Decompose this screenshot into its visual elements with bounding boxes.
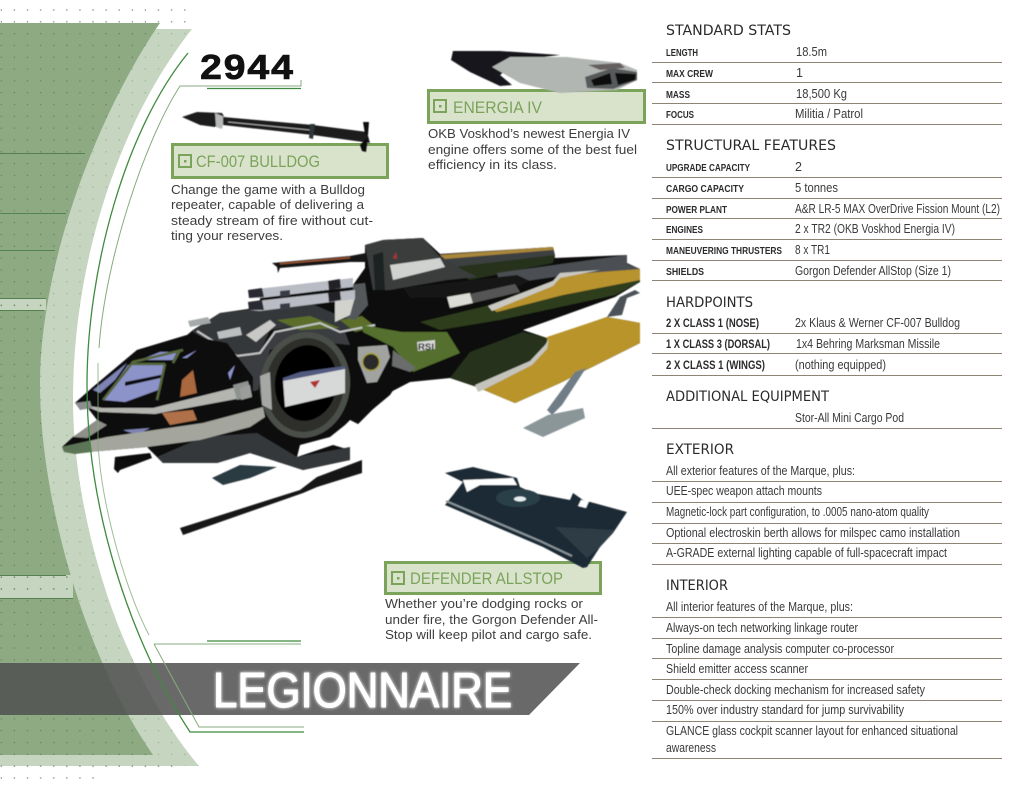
background: green curved panels with dot grid — [0, 5, 200, 782]
panel: exterior — [652, 442, 1002, 564]
row: dorsal hardpoint: 1 X CLASS 3 (DORSAL) — [666, 339, 770, 351]
callout: Energia IV — [428, 51, 644, 172]
heading: hardpoints: HARDPOINTS — [666, 295, 753, 311]
description: Energia IV — [428, 126, 637, 172]
row: length — [652, 45, 1002, 62]
row: upgrade capacity: UPGRADE CAPACITY — [666, 162, 750, 174]
upper rear wings — [420, 247, 640, 330]
description: Defender AllStop: under fire, the Gorgon Defender All- — [385, 612, 598, 627]
row: engines — [652, 222, 1002, 240]
panel: hardpoints — [652, 295, 1002, 376]
row: focus: Militia / Patrol — [795, 107, 863, 121]
panel: additional equipment — [652, 389, 1002, 428]
cockpit tower — [365, 238, 477, 290]
green side pod with RSI mark: RSI — [418, 342, 434, 352]
row: cockpit layout: GLANCE glass cockpit scanner layout for enhanced situational — [666, 724, 958, 738]
shield generator image — [445, 467, 627, 568]
cockpit canopy — [75, 335, 253, 435]
label box: Defender AllStop — [386, 562, 600, 594]
thruster cylinder — [356, 345, 400, 424]
row: max crew: MAX CREW — [666, 68, 713, 80]
description: Bulldog: steady stream of fire without cut- — [171, 213, 373, 228]
ship silhouette base — [62, 238, 640, 470]
row: shields — [652, 264, 1002, 280]
row: dorsal hardpoint: 1x4 Behring Marksman Missile — [796, 337, 940, 351]
row: cargo pod: Stor-All Mini Cargo Pod — [795, 411, 904, 425]
description: Energia IV: efficiency in its class. — [428, 157, 557, 172]
row: wing hardpoints: 2 X CLASS 1 (WINGS) — [666, 360, 765, 372]
row: maneuvering thrusters — [652, 243, 1002, 260]
row: upgrade capacity: 2 — [795, 160, 802, 174]
label box: Energia IV: ENERGIA IV — [453, 98, 543, 117]
row: max crew — [652, 66, 1002, 82]
mid weapon rack — [403, 275, 530, 308]
missile racks — [248, 278, 368, 322]
heading: additional equipment: ADDITIONAL EQUIPMENT — [666, 389, 829, 405]
row: engines: ENGINES — [666, 224, 703, 236]
row: interior intro: All interior features of the Marque, plus: — [666, 600, 853, 614]
decorative arcs and title frame lines — [87, 53, 304, 732]
description: Bulldog: repeater, capable of delivering a — [171, 197, 365, 212]
engine ring with grille panel — [240, 326, 357, 444]
row: upgrade capacity — [652, 160, 1002, 178]
description: Energia IV: OKB Voskhod’s newest Energia IV — [428, 126, 630, 141]
heading: exterior: EXTERIOR — [666, 442, 734, 458]
row: max crew: 1 — [796, 66, 803, 80]
label box: CF-007 Bulldog: CF-007 BULLDOG — [196, 152, 320, 171]
row: cargo capacity — [652, 181, 1002, 198]
title banner — [0, 663, 580, 718]
panel: interior — [652, 578, 1002, 758]
heading: structural features: STRUCTURAL FEATURES — [666, 138, 836, 154]
green side pod with RSI mark — [362, 325, 460, 372]
row: docking: Double-check docking mechanism for increased safety — [666, 683, 926, 697]
heading: standard stats: STANDARD STATS — [666, 23, 791, 39]
row: length: LENGTH — [666, 47, 698, 59]
row: dorsal hardpoint — [652, 337, 1002, 354]
row: jump survivability: 150% over industry standard for jump survivability — [666, 703, 905, 717]
row: maneuvering thrusters: 8 x TR1 — [795, 243, 830, 257]
row: engines: 2 x TR2 (OKB Voskhod Energia IV) — [795, 222, 955, 236]
weapon image: Bulldog repeater — [182, 112, 370, 152]
lower mandible — [62, 407, 265, 454]
heading: interior: INTERIOR — [666, 578, 728, 594]
row: power plant: POWER PLANT — [666, 204, 727, 216]
label box: Defender AllStop: DEFENDER ALLSTOP — [410, 569, 563, 588]
row: lighting: A-GRADE external lighting capable of full-spacecraft impact — [666, 546, 947, 560]
row: shields: SHIELDS — [666, 266, 704, 278]
panel: standard stats — [652, 23, 1002, 124]
description: Bulldog: Change the game with a Bulldog — [171, 182, 365, 197]
row: networking: Always-on tech networking linkage router — [666, 621, 858, 635]
engine image — [451, 51, 637, 93]
row: maneuvering thrusters: MANEUVERING THRUSTERS — [666, 245, 782, 257]
row: cockpit layout: awareness — [666, 741, 716, 755]
description: Defender AllStop: Stop will keep pilot and cargo safe. — [385, 627, 592, 642]
row: wing hardpoints — [652, 358, 1002, 376]
row: exterior intro: All exterior features of the Marque, plus: — [666, 464, 855, 478]
row: mass: MASS — [666, 89, 690, 101]
row: wing hardpoints: (nothing equipped) — [795, 358, 886, 372]
description: Energia IV: engine offers some of the best fuel — [428, 142, 637, 157]
row: nose hardpoint: 2x Klaus & Werner CF-007 Bulldog — [795, 316, 960, 330]
row: electroskin: Optional electroskin berth allows for milspec camo installation — [666, 526, 960, 540]
ship illustration — [62, 238, 640, 535]
panel: structural features — [652, 138, 1002, 280]
row: cargo capacity: 5 tonnes — [795, 181, 838, 195]
row: cargo capacity: CARGO CAPACITY — [666, 183, 744, 195]
title: Legionnaire: LEGIONNAIRE — [213, 664, 512, 718]
callout: CF-007 Bulldog — [171, 112, 388, 243]
lower hull and guns — [114, 433, 362, 535]
row: length: 18.5m — [796, 45, 827, 59]
row: focus: FOCUS — [666, 109, 694, 121]
callout: Defender AllStop — [385, 467, 627, 642]
row: cockpit layout — [652, 724, 1002, 758]
row: power plant — [652, 202, 1002, 218]
row: mass — [652, 87, 1002, 104]
top antenna rods — [272, 253, 366, 273]
description: Defender AllStop: Whether you’re dodging rocks or — [385, 596, 584, 611]
label box: Energia IV — [428, 90, 644, 122]
row: nose hardpoint: 2 X CLASS 1 (NOSE) — [666, 318, 759, 330]
row: shield scanner: Shield emitter access scanner — [666, 662, 808, 676]
lower wing — [450, 290, 640, 403]
row: damage analysis: Topline damage analysis computer co-processor — [666, 642, 894, 656]
row: mass: 18,500 Kg — [796, 87, 847, 101]
label box: CF-007 Bulldog — [172, 144, 388, 178]
row: focus — [652, 107, 1002, 124]
description: Bulldog — [171, 182, 373, 243]
landing strut and foot — [523, 368, 586, 437]
year 2944: 2944 — [199, 49, 294, 90]
row: shields: Gorgon Defender AllStop (Size 1) — [795, 264, 951, 278]
row: weapon mounts: UEE-spec weapon attach mounts — [666, 484, 822, 498]
row: nose hardpoint — [652, 316, 1002, 334]
row: magnetic-lock: Magnetic-lock part configuration, to .0005 nano-atom quality — [666, 505, 930, 519]
description: Bulldog: ting your reserves. — [171, 228, 283, 243]
upper hull — [188, 303, 376, 395]
description: Defender AllStop — [385, 596, 598, 642]
